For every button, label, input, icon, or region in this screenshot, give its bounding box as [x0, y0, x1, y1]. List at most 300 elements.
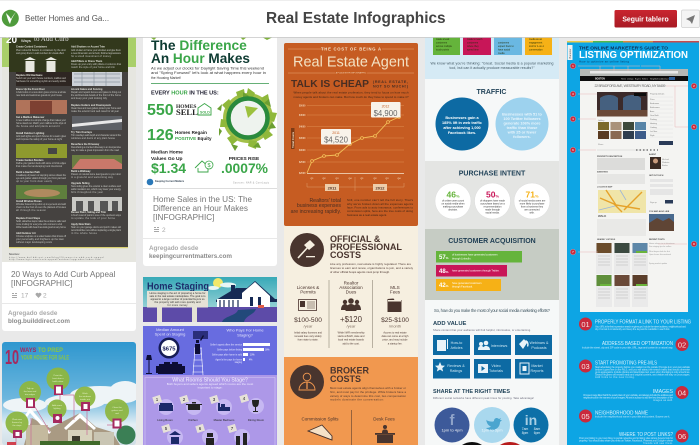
logo and sources: Sources: NAR & CoreLogic: [233, 182, 270, 184]
tips text: START PROMOTING PRE-MLS: [595, 360, 657, 366]
tips text: Dress Up the Front Door: [16, 88, 45, 91]
tips text: Wide treads with clean lines look good on any home: [16, 226, 67, 229]
column: licenses: /year: [304, 324, 313, 328]
map: [598, 190, 646, 213]
panel: add value: 1pm to 4pm: [441, 428, 463, 432]
tips text: A fresh coat of paint is one of the quickest ways: [71, 214, 122, 217]
big number circles: 01: [581, 320, 590, 329]
property table: Cooling: [650, 127, 657, 129]
infographic: 20 ways to add curb appeal: to Add Curb: [34, 35, 69, 43]
callout: 2011: 2011: [332, 131, 340, 135]
bubble text: Paint the: [54, 374, 63, 377]
callout: 2011: [321, 129, 351, 144]
pin title: [11, 270, 116, 288]
bar chart: staging: [235, 361, 243, 364]
infographic: the difference an hour makes: An Hour Makes: [151, 51, 250, 66]
panel: add value: Video: [491, 364, 501, 368]
panel: add value: 7am: [522, 427, 528, 431]
panel: talk is cheap: [284, 43, 418, 226]
website screenshot: What buyers look for first: [649, 250, 670, 253]
tips text: Pavers or natural stone lead guests to your door: [71, 173, 121, 176]
panel: intro: made to reach: [467, 38, 483, 41]
panel: traffic: followers.: [513, 135, 531, 139]
stat: 550 homes sell: SOLD: [200, 110, 210, 114]
panel: customer acquisition: 42%: [439, 283, 449, 289]
callout: 2012: [371, 102, 400, 118]
column: realtor dues: While NAR membership: [338, 332, 365, 334]
tips text: Replace Front Steps: [16, 217, 41, 220]
gallery thumbnails: [598, 122, 646, 139]
website screenshot: Listings: [627, 78, 633, 80]
panel: median amount spent: Staging?: [237, 332, 254, 338]
green tip bubbles: [6, 368, 129, 434]
tips text: Solid, attractive steps make the entrance safer and: [16, 220, 67, 223]
panel: intro: tool, but can it actually produce measurable results?": [450, 66, 535, 70]
pin card: 20 ways curb appeal: [2, 30, 136, 331]
tips text: Replace Old Hardware: [16, 74, 43, 77]
panel: talk is cheap: Real Estate Agent: [293, 54, 409, 70]
panel: talk is cheap: A PLACESTER INFOGRAPHIC: [336, 72, 367, 74]
infographic: listing optimization: Choose image titles that fit the exact place of your website, and always include the address and: [583, 393, 674, 397]
bubble text: roof: [115, 412, 119, 415]
source: keepingcurrentmatters.com: [149, 253, 232, 260]
icon: painter on ladder: [192, 348, 204, 375]
column: realtor dues: [338, 280, 365, 346]
tips text: A new mailbox is a simple change that makes your: [16, 119, 66, 122]
tips text: in a graceful and welcoming way: [71, 176, 114, 179]
tips text: and group them in odd numbers for visual effect: [16, 52, 64, 55]
panel: customer acquisition: [425, 229, 559, 300]
banner: for more money: [168, 303, 188, 307]
infographic: listing optimization: [567, 41, 699, 445]
website screenshot: WALK: [598, 214, 606, 218]
numbered markers: [570, 63, 697, 255]
stat: median home values: $: [207, 163, 211, 169]
bubble text: the windows: [79, 395, 92, 398]
infographic: listing optimization: Your URL is the first impression search engines get. Include the street address, neighborhood and: [595, 324, 687, 328]
blue panel: [567, 41, 699, 445]
stat: prices rise: .0007%: [221, 160, 269, 176]
tips text: your personality and brightens up the lawn: [16, 238, 65, 241]
tips text: Switch out your worn house numbers, mailbox and: [16, 77, 67, 80]
tips text: A walkway of pavers or stepping stones draws the: [16, 174, 67, 177]
panel: what rooms should you stage: 3: [213, 397, 216, 402]
description: PROPERTY DESCRIPTION: [597, 156, 623, 158]
panel: add value: How-to: [451, 341, 462, 345]
numbered markers: 3: [572, 92, 574, 96]
infographic: social media marketing: [425, 37, 559, 445]
panel: what rooms should you stage: 2: [183, 397, 186, 402]
tips text: for a small investment of money: [71, 55, 112, 58]
line chart: total costs: Q1: [311, 178, 314, 180]
infographic: listing optimization: Add links to the new listing.: [595, 375, 635, 379]
property table: Year Built: [650, 114, 659, 117]
tips text: new look and welcomes guests to your house: [16, 94, 63, 97]
panel: intro: tool for 1-on-1: [529, 45, 545, 48]
main photo: [597, 92, 648, 116]
board owner: Better Homes and Ga...: [25, 14, 109, 23]
tips text: make the exterior look well cared for all year: [71, 110, 119, 113]
panel: purchase intent: 71%: [525, 190, 539, 200]
website screenshot: Buyers: [635, 78, 641, 80]
infographic: 20 ways to add curb appeal: [2, 35, 136, 262]
bubble text: front door a: [52, 377, 64, 380]
line chart: total costs: Total Costs: [291, 132, 295, 148]
panel: traffic: generate 106% more: [504, 122, 540, 126]
property table: Heating: [650, 122, 657, 125]
banner: sale in the real estate marketplace. The goal is to: [150, 294, 206, 298]
bar chart: Seller pays after home is sold: [212, 354, 243, 356]
tips text: NEIGHBORHOOD NAME: [595, 410, 648, 416]
panel: official and professional costs: [284, 226, 418, 357]
panel: median amount spent: $675: [163, 346, 176, 352]
panel: add value: ADD VALUE: [433, 321, 467, 327]
stat: 126 homes regain: POSITIVE Equity: [175, 136, 212, 141]
infographic: listing optimization: go to aggregators. Include photos and descriptive text, even when the listing is only a few lines.: [595, 370, 690, 374]
panel: add value: 1pm to 3pm: [481, 428, 503, 432]
numbered markers: 1: [572, 64, 574, 68]
panel: add value: Interviews: [491, 344, 507, 348]
panel: intro: spend time: [467, 48, 479, 52]
follow button: [614, 10, 677, 28]
infographic: 20 ways to add curb appeal: http://www.hgtv.com/curb-appeal/outdoor-upgrades/index.html: [9, 258, 102, 261]
panel: customer acquisition: have generated customers: [452, 282, 482, 285]
icon: broker: [290, 365, 324, 399]
bubble text: flowers by: [12, 421, 23, 424]
heading: OFFICIAL &: [330, 234, 381, 244]
icon: sofa and lamp: [146, 355, 185, 374]
panel: purchase intent: on social media when: [442, 202, 465, 206]
panel: intro: customers: [467, 42, 479, 44]
panel: talk is cheap: When people talk about the real estate profession, they tend to focus on how much: [294, 90, 409, 94]
tips text: to update the look of your home: [71, 217, 116, 220]
big number circles: 06: [678, 432, 686, 441]
tips text: WHERE TO POST LINKS?: [619, 432, 673, 438]
big number circles: 02: [678, 340, 686, 349]
panel: add value: Share content that your audience will find helpful, informative, or entertaining.: [433, 328, 531, 332]
panel: purchase intent: 46%: [446, 190, 460, 200]
panel: purchase intent: from a business they: [521, 206, 544, 208]
panel: intro: media as an: [529, 38, 543, 41]
website screenshot: 22 BRADFORD AVE, WESTBURY ROAD, NY 54409: [594, 84, 666, 88]
pin title: Home Sales in the US: The: [153, 195, 253, 204]
agent: Webster: [662, 161, 670, 164]
heading: COSTS: [330, 374, 361, 384]
tips text: without major landscaping costs: [16, 241, 53, 244]
tip icons: [7, 385, 122, 445]
panel: customer acquisition: CUSTOMER ACQUISITION: [448, 238, 536, 245]
panel: broker costs: Desk Fees: [373, 416, 395, 422]
tips text: Stain on your garage doors and porch makes old: [71, 226, 122, 229]
panel: traffic: Facebook likes.: [448, 131, 476, 135]
website screenshot: Neighborhoods: [650, 78, 663, 80]
tips text: Create Garden Borders: [16, 159, 44, 162]
bubble text: lighting: [54, 407, 61, 410]
panel: add value: SHARE AT THE RIGHT TIMES: [433, 389, 510, 395]
source: blog.builddirect.com: [8, 318, 70, 325]
column: licenses: $100-500: [294, 317, 322, 324]
panel: add value: Market: [531, 364, 543, 368]
tips text: IMAGES: [653, 389, 674, 395]
website screenshot: Share: [598, 144, 604, 146]
infographic: listing optimization: friends will see them.: [643, 441, 673, 445]
tips text: windows and doors of any plain house: [71, 137, 116, 140]
contact form: [649, 175, 673, 204]
panel: official and professional costs: Like any profession, real estate is highly regulated. There are: [330, 262, 411, 266]
bubble text: Wash: [82, 393, 89, 395]
stat: 550 homes sell: SELL: [176, 107, 198, 117]
tips text: wood look like new without replacing a single plank: [71, 229, 122, 232]
panel: intro: We know what you're thinking: "Great. Social media is a popular marketing: [430, 62, 554, 66]
agent: Broker: [662, 165, 668, 167]
heading: THE ONLINE MARKETER'S GUIDE TO: [579, 46, 668, 52]
panel: talk is cheap: face. From ads to auto insurance, conferences to: [347, 206, 413, 210]
panel: official and professional costs: of other official hoops agents must jump through.: [330, 270, 390, 274]
tips text: Replace Gutters and Downspouts: [71, 104, 112, 107]
property table: Area: [650, 110, 655, 113]
panel: customer acquisition: 48%: [439, 269, 449, 275]
stat: 126 homes regain: 126: [147, 127, 174, 144]
banner: the property will sell more quickly and: [154, 300, 201, 304]
bubble text: bold colour: [53, 380, 64, 383]
board logo: [2, 10, 19, 27]
tips text: Try Trim Overlays: [71, 131, 93, 134]
panel: add value: Reports: [531, 369, 544, 373]
property table: Lot Size: [650, 130, 658, 133]
column: licenses: Initial salary licenses and: [294, 332, 323, 334]
panel: what rooms should you stage: 7: [231, 426, 234, 431]
column: mls fees: $25-$100: [381, 317, 409, 324]
column: mls fees: /month: [389, 324, 401, 328]
tips text: Clean lines and new gutters protect your home and: [71, 107, 122, 110]
banner: appeal to a large number of potential buyers so: [150, 297, 205, 301]
panel: median amount spent: Who Pays For Home: [226, 328, 264, 332]
panel: purchase intent: with.: [530, 212, 535, 214]
tips text: Renew Paint, Siding and Trim: [71, 211, 107, 214]
room labels: Kitchen: [188, 418, 198, 422]
banner: Home staging is the act of preparing a home for: [150, 291, 206, 295]
panel: talk is cheap: commission splits, here are the true costs of doing: [347, 209, 413, 213]
panel: broker costs: models dominate the conversation:: [330, 398, 384, 402]
column: realtor dues: Association: [339, 285, 363, 290]
panel: purchase intent: of online users count: [442, 200, 464, 202]
tips text: more inviting for everyone who comes to visit: [16, 223, 62, 226]
tips text: eye and guides visitors through your front yard and: [16, 177, 67, 180]
stat: median home values: Median Home: [151, 150, 183, 156]
bar chart: 10%: [250, 354, 255, 356]
line chart: total costs: Q3: [386, 178, 389, 180]
agent: [649, 153, 670, 169]
tips text: Choose sculpture or a water feature that shows off: [16, 235, 66, 238]
panel: add value: Tutorials: [489, 369, 503, 373]
chart caption: business expenses: [297, 203, 341, 209]
panel: customer acquisition: through LinkedIn.: [452, 258, 472, 260]
website screenshot: Five staging tips for sellers: [649, 245, 671, 248]
infographic: listing optimization: images as well.: [653, 398, 673, 402]
tips text: New siding gives the exterior a clean surface and: [71, 185, 122, 188]
stat: median home values: [151, 150, 213, 176]
panel: intro: customers: [498, 42, 510, 44]
panel: intro: have social: [498, 48, 510, 52]
source: [149, 245, 232, 260]
pin stats: 2: [162, 227, 166, 234]
infographic: the cost of being a real estate agent: [284, 43, 418, 445]
tips text: Install Window Boxes: [16, 200, 42, 203]
panel: add value: Different social networks have different peak times for posting. Take advantage!: [433, 396, 534, 400]
agent: Michael: [662, 159, 669, 161]
tips text: Add Pillars or Dress Them: [71, 60, 103, 63]
line chart: total costs: $4000: [299, 126, 306, 128]
social circles: [434, 408, 470, 442]
panel: traffic: 185% lift in web traffic: [442, 121, 482, 125]
panel: official and professional costs: licenses to earn and renew, organizations to join, and a variety: [330, 266, 414, 270]
heading: YOUR HOUSE FOR SALE: [21, 354, 69, 362]
follow button: Seguir tablero: [622, 16, 669, 24]
tips text: a new dimension and a fresh, finished appearance: [71, 52, 122, 55]
website screenshot: RECENT POSTS: [649, 239, 665, 241]
panel: traffic: after achieving 1,000: [443, 126, 481, 130]
bar chart: Seller pays before listing: [217, 348, 243, 352]
clouds: [3, 381, 141, 412]
bar chart: Agent's fee pays for home: [215, 358, 243, 362]
heading: [330, 234, 403, 260]
line chart: total costs: $5000: [299, 106, 306, 108]
panel: customer acquisition: through Facebook.: [452, 286, 473, 288]
tips text: Apply New Stain: [71, 223, 91, 226]
panel: intro: media: [498, 52, 505, 55]
icon: gavel: [290, 233, 324, 267]
pin title: 20 Ways to Add Curb Appeal: [11, 270, 116, 279]
infographic: 20 ways to add curb appeal: Ways: [21, 38, 31, 43]
website screenshot: Home values rise in downtown: [649, 242, 675, 245]
panel: median amount spent: Spent on Staging: [155, 332, 185, 336]
panel: talk is cheap: business as a real estate agent.: [347, 213, 387, 217]
panel: purchase intent: a purchase based on a: [480, 202, 505, 206]
panel: median amount spent: Median Amount: [156, 327, 185, 332]
panel: intro: across multiple: [436, 45, 453, 48]
card background: [143, 30, 277, 266]
column: mls fees: Fees: [390, 290, 401, 294]
panel: add value: Reviews &: [447, 364, 465, 368]
tips text: Window boxes bring color up to eye level and add: [16, 203, 67, 206]
website screenshot: Home: [621, 78, 626, 80]
column: licenses: Permits: [300, 290, 316, 294]
line chart: total costs: 2012: [376, 186, 385, 190]
nearby listing cards: [596, 243, 648, 307]
banner: [143, 277, 277, 322]
bubble text: inside, out: [80, 398, 90, 401]
heading: [6, 348, 69, 364]
room labels: Dining Room: [248, 418, 265, 422]
tips text: [16, 46, 122, 244]
logo and sources: [147, 179, 270, 185]
panel: what rooms should you stage: important to stage:: [198, 386, 223, 390]
infographic: listing optimization: property. You should also share your links on Twitter, Facebook, Pinterest and Google+ where: [579, 438, 674, 442]
panel: intro: expect them to: [498, 45, 514, 48]
bubble text: trim edges: [25, 393, 36, 396]
bar chart: Seller's agent offers the service: [210, 344, 243, 346]
panel: purchase intent: PURCHASE INTENT: [459, 170, 526, 178]
chart caption: are increasing rapidly.: [291, 209, 341, 215]
panel: what rooms should you stage: What Rooms Should You Stage?: [172, 378, 248, 384]
heading: [579, 46, 688, 64]
website screenshot: Spring market update: [649, 262, 667, 265]
panel: purchase intent: 50%: [486, 190, 499, 200]
tips text: Repair and repaint fences and gates to bring out: [71, 91, 121, 94]
infographic: listing optimization: Include the street, city and ZIP code in your title, URL, tags and content in a natural way.: [582, 346, 673, 350]
website screenshot: BOSTON: [595, 78, 605, 80]
property table: Bedrooms: [650, 103, 659, 105]
panel: intro: engagement: [529, 42, 543, 44]
heading: How to optimize an online listing: [579, 60, 629, 64]
header bar: [0, 0, 700, 38]
panel: what rooms should you stage: [143, 375, 277, 445]
infographic: listing optimization: Search engines will reward early and original content, and visitors will stay on your pages.: [595, 372, 690, 376]
column: mls fees: a startup fee.: [388, 342, 403, 346]
heading: PROFESSIONAL: [330, 242, 403, 252]
pin title: [153, 195, 253, 222]
tag: [568, 45, 572, 60]
column: licenses: Licenses &: [297, 285, 319, 290]
chart caption: Realtors' total: [309, 198, 341, 204]
line chart: total costs: Q4: [349, 177, 352, 180]
column: realtor dues: Dues: [346, 290, 357, 294]
stat: 550 homes sell: [147, 102, 211, 119]
line chart: total costs: $3500: [299, 138, 306, 140]
tips text: up to your front door easily: [16, 180, 53, 183]
panel: add value: Webinars &: [530, 341, 549, 345]
pin stats: [12, 292, 47, 300]
line chart: total costs: $3000: [299, 150, 306, 152]
panel: add value: 8am: [534, 427, 540, 431]
big number circles: 04: [678, 388, 686, 397]
line chart: total costs: $4500: [299, 114, 306, 117]
panel: what rooms should you stage: Both buyers and sellers agents agreed which rooms are the most: [167, 382, 253, 386]
column: licenses: [294, 285, 323, 342]
tips text: adds insulation too, which may lower your energy: [71, 188, 122, 191]
panel: purchase intent: recommendation: [484, 206, 502, 208]
pin stats: 17: [21, 292, 29, 300]
infographic: 20 ways to add curb appeal: Sources:: [9, 253, 20, 256]
banner: Home Staging: [147, 282, 209, 292]
numbered markers: 5: [693, 125, 695, 129]
tag: Placester: [569, 48, 572, 59]
panel: add value: f: [450, 412, 456, 429]
stat: median home values: Values Go Up: [151, 156, 183, 162]
panel: add value: Articles: [450, 346, 463, 350]
bubble text: the steps: [13, 424, 22, 427]
tips text: Add Shutters or Accent Trim: [71, 46, 106, 48]
bubble text: Tidy up: [26, 388, 34, 390]
property table: Property Details: [650, 92, 664, 96]
pin card: difference an hour makes: [143, 30, 277, 266]
line chart: total costs: $2500: [299, 162, 306, 164]
tips text: Create Curbed Containers: [16, 46, 48, 48]
infographic: the difference an hour makes: EVERY HOUR IN THE US:: [151, 90, 219, 96]
icon: pie slice: [308, 425, 332, 440]
number tags: [152, 394, 249, 433]
callout: 2011: $4,520: [324, 136, 349, 144]
website screenshot: Contact: [662, 78, 669, 80]
panel: add value: 8pm: [522, 431, 528, 435]
panel: talk is cheap: Still, one number can't tell the full story. That's: [347, 198, 414, 202]
heading: WAYS TO PREP: [20, 347, 64, 354]
panel: purchase intent: of shoppers have made: [480, 200, 506, 202]
line chart: total costs: [291, 102, 404, 191]
tips text: home stand out. Match your mailbox to the style of: [16, 122, 66, 125]
panel: add value: Podcasts: [531, 346, 547, 350]
panel: talk is cheap: THE COST OF BEING A: [321, 46, 381, 52]
